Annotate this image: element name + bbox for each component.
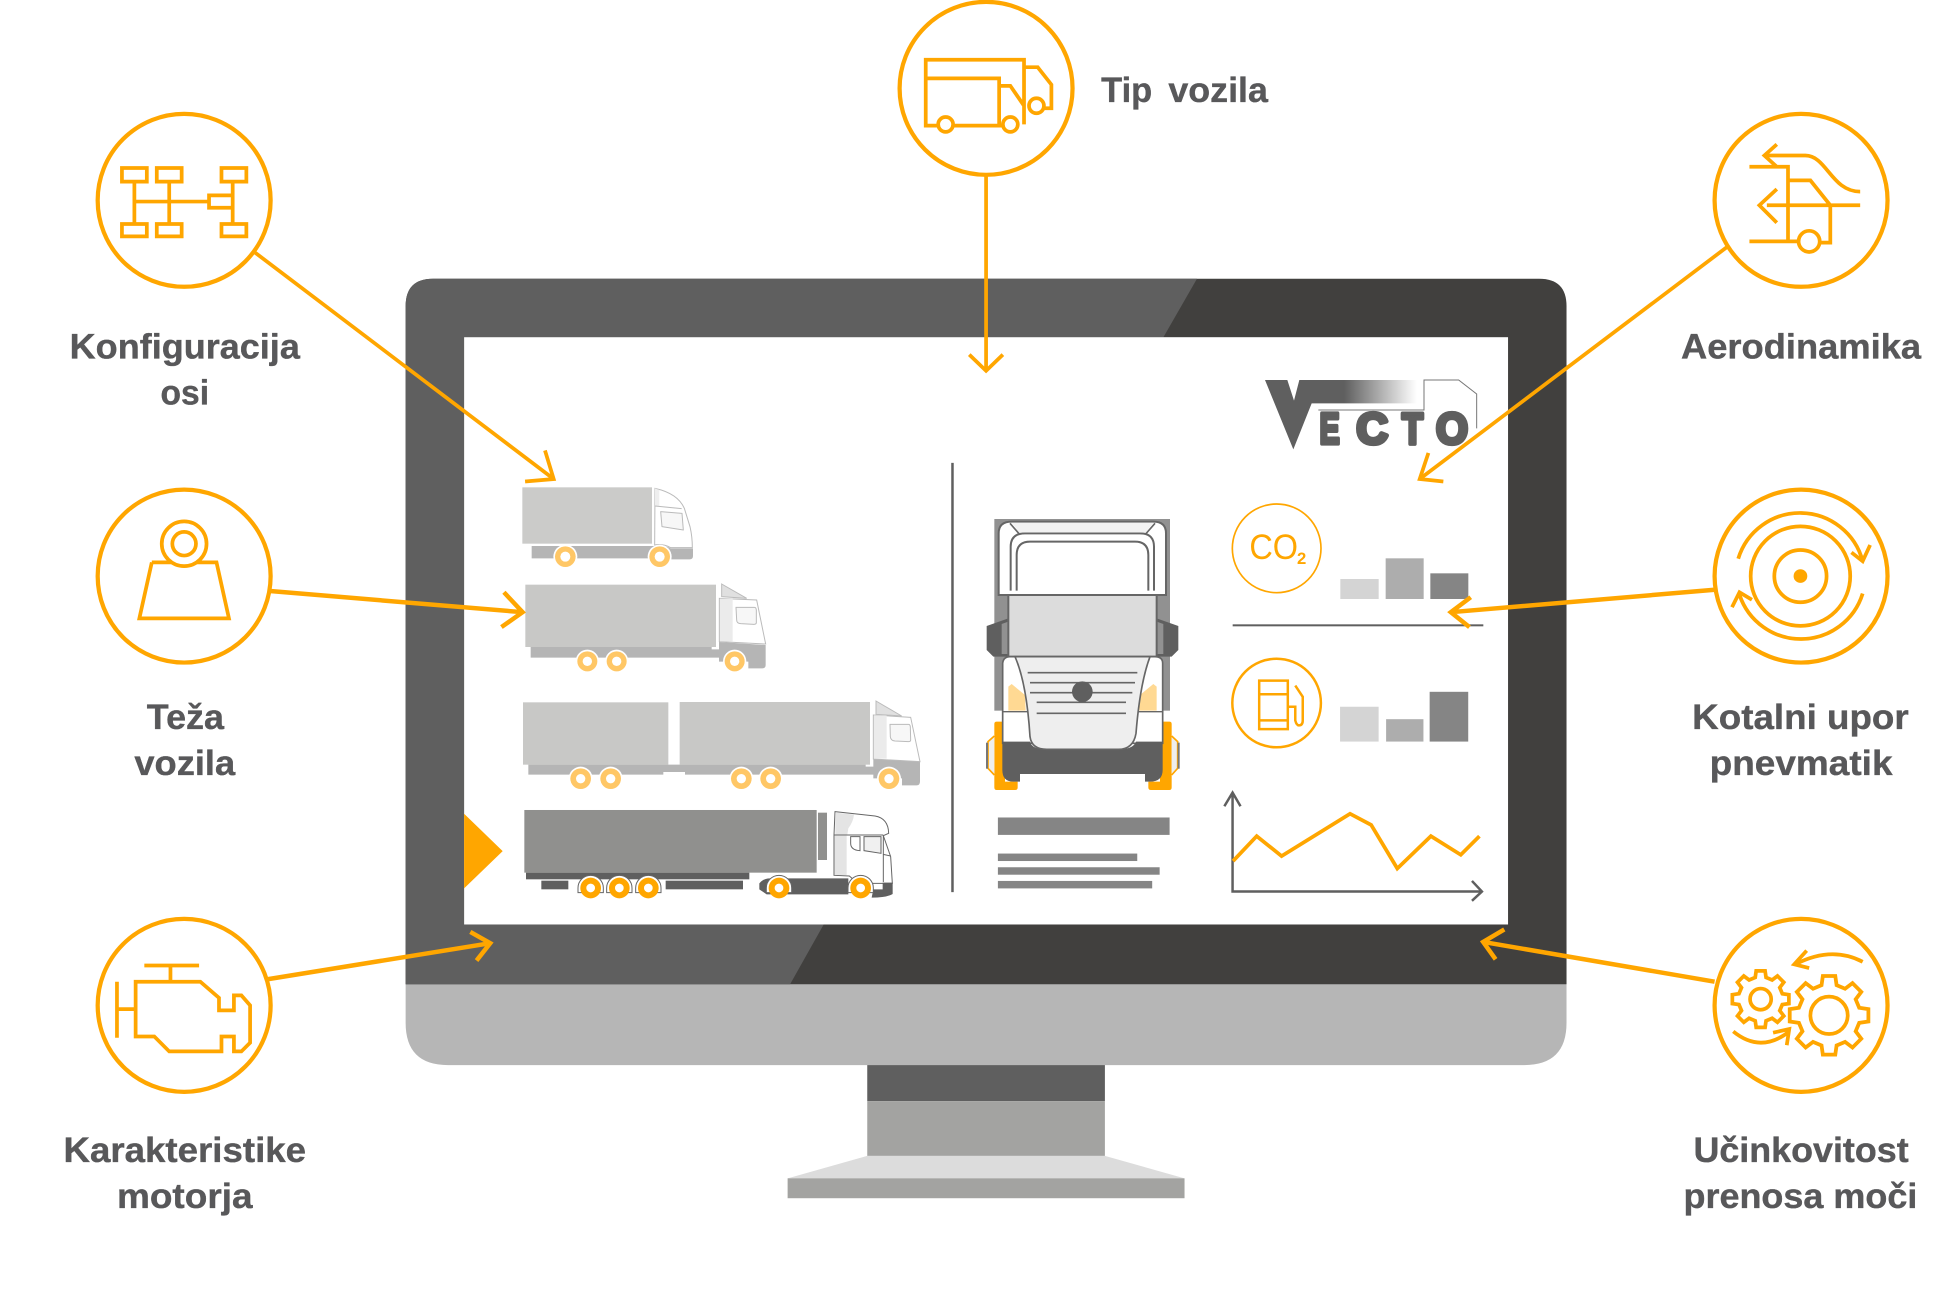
heading: engine [63,1131,306,1216]
mirror right [1157,618,1178,657]
stand neck [867,1065,1105,1101]
icon: axle configuration [98,114,271,287]
heading: axle configuration: osi [161,373,209,412]
arrow: vehicle type [969,175,1003,371]
logo VECTO: T [1402,406,1423,454]
arrow: engine [268,932,490,979]
heading: vehicle weight: Teža [147,698,225,737]
arrow: axle configuration [255,253,554,482]
monitor [406,279,1567,1198]
icon: weight [98,490,271,663]
heading: vehicle type: vozila [1168,71,1269,110]
monitor frame light [406,279,1197,984]
logo VECTO: C [1356,406,1388,454]
CO2 bars [1340,558,1468,599]
tyres left [994,722,1018,790]
logo VECTO: E [1320,406,1340,454]
trailer behind [994,519,1170,711]
CO2 circle [1232,504,1321,593]
arrow: aerodynamics [1420,245,1730,482]
text bars [998,817,1170,888]
CO2 circle: CO [1249,528,1298,567]
logo VECTO [1265,380,1477,454]
arrow: vehicle weight [270,591,523,627]
grille [1015,657,1150,749]
divider [951,463,954,892]
heading: axle configuration: Konfiguracija [70,327,301,366]
line chart [1224,793,1482,901]
fuel circle [1232,659,1321,747]
monitor screen [464,337,1508,924]
fuel bars [1340,692,1468,742]
headlights [1008,684,1026,711]
windshield [1008,595,1157,657]
stand lower neck [867,1101,1105,1156]
stand base top [788,1156,1185,1178]
icon: vehicle type [900,2,1073,175]
heading: vehicle weight [134,698,236,783]
stand base [788,1178,1185,1198]
rim right [1172,736,1178,775]
CO2 circle: 2 [1297,549,1306,568]
heading: transmission [1683,1131,1917,1216]
mirror left [987,618,1008,657]
heading: engine: motorja [117,1177,253,1216]
truck 3 [523,701,920,791]
cab body [1003,657,1163,743]
heading: rolling resistance [1692,698,1909,783]
heading: vehicle type [1101,71,1269,110]
bumper [1002,742,1163,782]
heading: vehicle type: Tip [1101,71,1152,110]
logo and CO2 block [1232,380,1483,626]
heading: transmission: prenosa moči [1683,1177,1917,1216]
heading: rolling resistance: pnevmatik [1710,744,1893,783]
arrow: transmission [1483,929,1715,982]
icon: aerodynamics [1715,114,1888,287]
heading: rolling resistance: Kotalni upor [1692,698,1909,737]
front view truck [986,519,1180,790]
icon: engine [98,919,271,1092]
truck 1 [522,487,693,569]
cab roof [999,522,1166,595]
selection triangle [464,814,503,888]
icon: gears [1715,919,1888,1092]
monitor chin [406,946,1567,1065]
arrow: rolling resistance [1451,590,1715,627]
icon: tyre [1715,490,1888,663]
truck 2 [525,584,766,673]
rim left [988,736,994,775]
tyres right [1148,722,1172,790]
heading: aerodynamics: Aerodinamika [1681,327,1922,366]
heading: vehicle weight: vozila [134,744,236,783]
truck 4 selected [524,810,893,898]
wheels [578,875,873,893]
heading: transmission: Učinkovitost [1693,1131,1909,1170]
logo VECTO: O [1436,406,1468,454]
heading: axle configuration [70,327,301,412]
heading: engine: Karakteristike [63,1131,306,1170]
vehicle list [522,487,920,898]
monitor frame dark [406,279,1567,984]
